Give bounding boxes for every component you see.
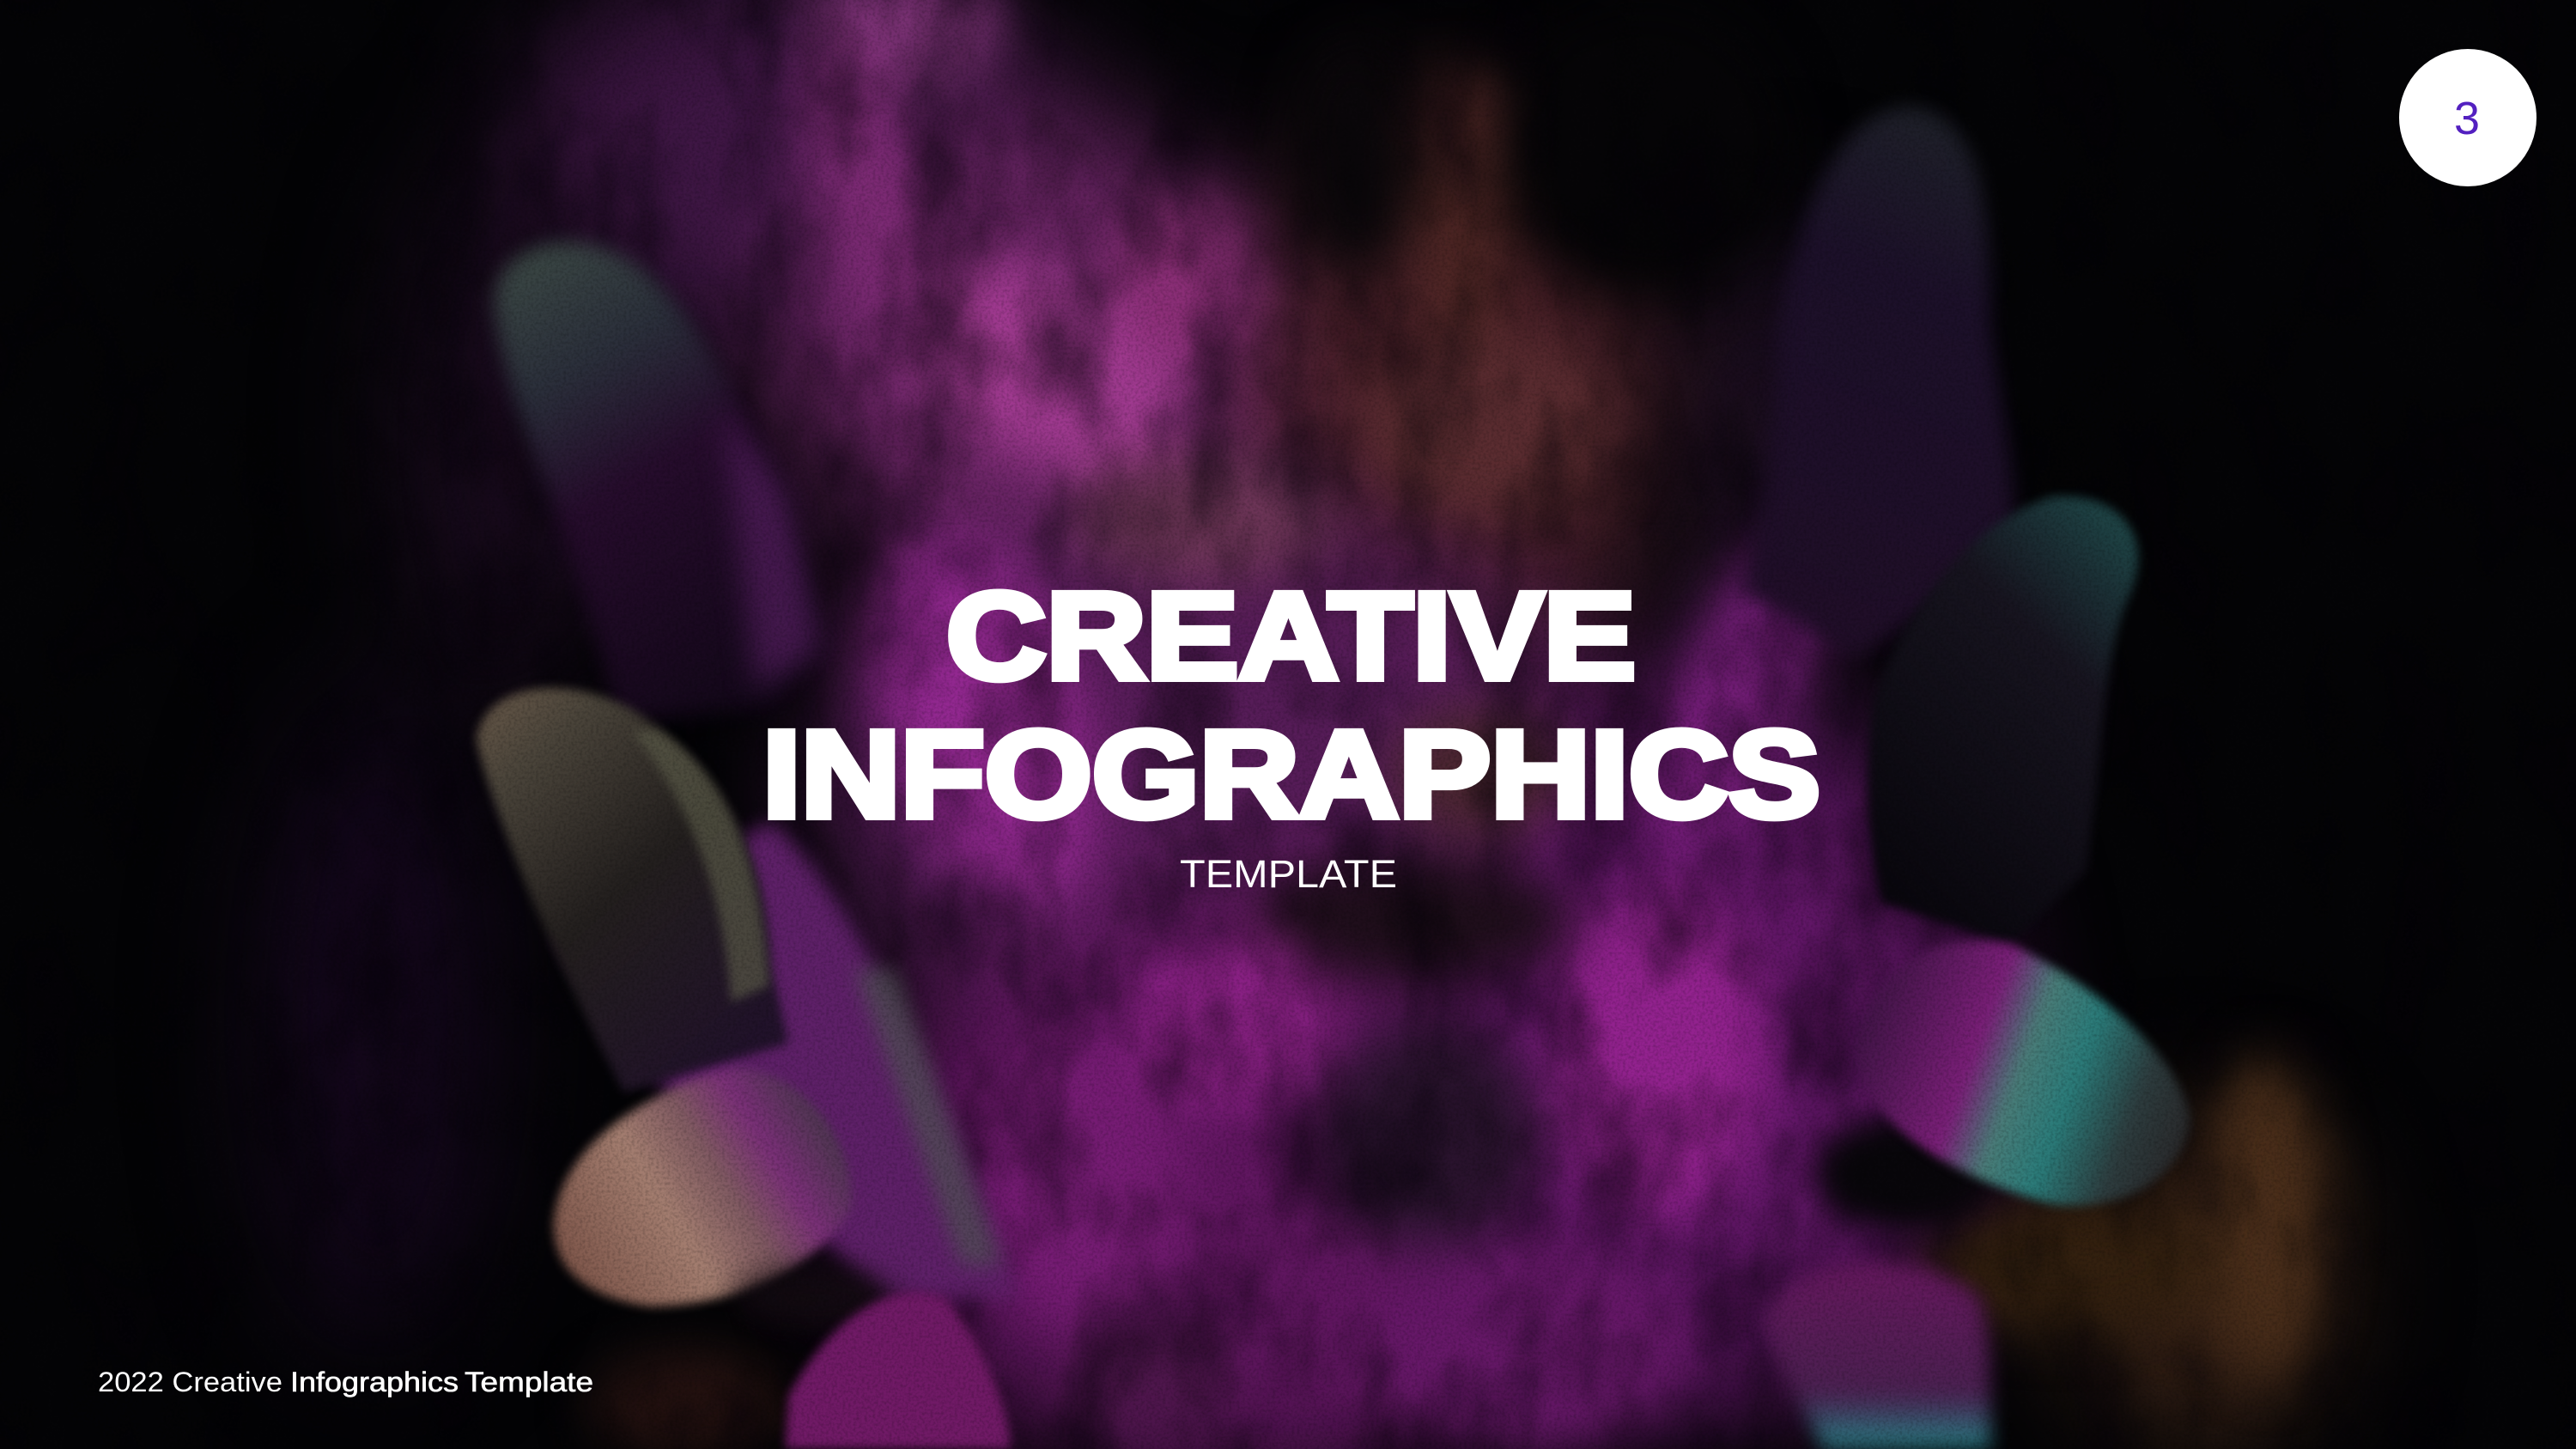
right hand fingers [1741,107,2190,1449]
finger: middle right [1868,496,2138,945]
finger: bottom right [1766,1263,1991,1449]
subtitle: TEMPLATE [1180,852,1397,896]
left hand fingers [477,242,1018,1449]
footer text: Template [465,1367,593,1397]
streak: green powder on palm [854,969,1002,1265]
title: CREATIVE [946,567,1636,705]
finger: right thumb [1856,941,2190,1205]
footer text: 2022 Creative [98,1367,283,1397]
palm: left [559,821,1018,1298]
finger: middle left [477,688,788,1093]
page number badge: 3 [2454,93,2480,144]
shadow: under left thumb [731,1269,896,1327]
shadow: under right thumb [1815,1117,1996,1233]
finger: upper left [495,242,822,723]
footer text: Infographics [290,1367,459,1397]
finger: upper right [1741,107,2014,657]
finger: left thumb [554,1068,851,1306]
finger edge: purple on upper left [723,411,822,690]
title: INFOGRAPHICS [762,705,1820,843]
finger edge: tan powder on middle left [633,731,769,1002]
finger: bottom left [786,1292,1011,1449]
